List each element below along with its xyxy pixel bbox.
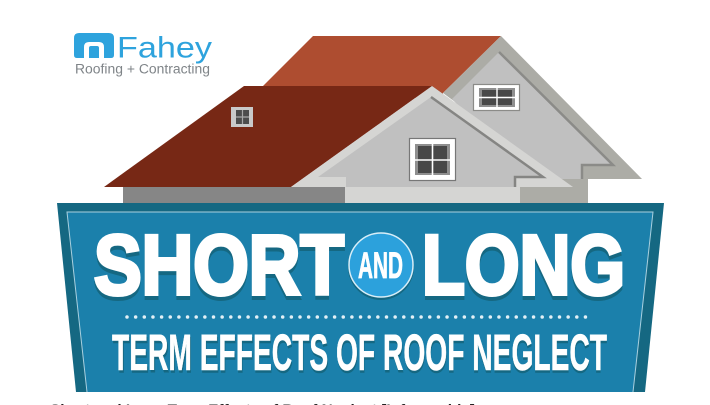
back roof [263,36,501,100]
logo: Fahey Roofing + Contracting [74,32,212,76]
badge: AND: AND [358,245,403,286]
front gable window [410,138,456,180]
badge: AND [348,233,414,300]
heading: LONG: LONG [422,222,625,316]
banner frame [57,203,664,392]
heading: SHORT: SHORT [94,218,344,312]
front gable [291,86,573,187]
side wall [123,187,345,203]
heading: SHORT: SHORT [94,222,344,316]
back gable window [474,84,520,110]
back gable [443,36,642,203]
heading: LONG: LONG [422,218,625,312]
banner face [67,212,653,392]
dotted divider [127,315,594,319]
banner [57,203,664,392]
illustration: house [104,36,642,203]
front wall base [345,187,520,203]
logo name: Fahey [117,32,212,64]
front roof [104,86,432,187]
icon: logo house [74,33,114,58]
roof window [231,107,253,127]
logo tagline: Roofing + Contracting [75,62,210,76]
